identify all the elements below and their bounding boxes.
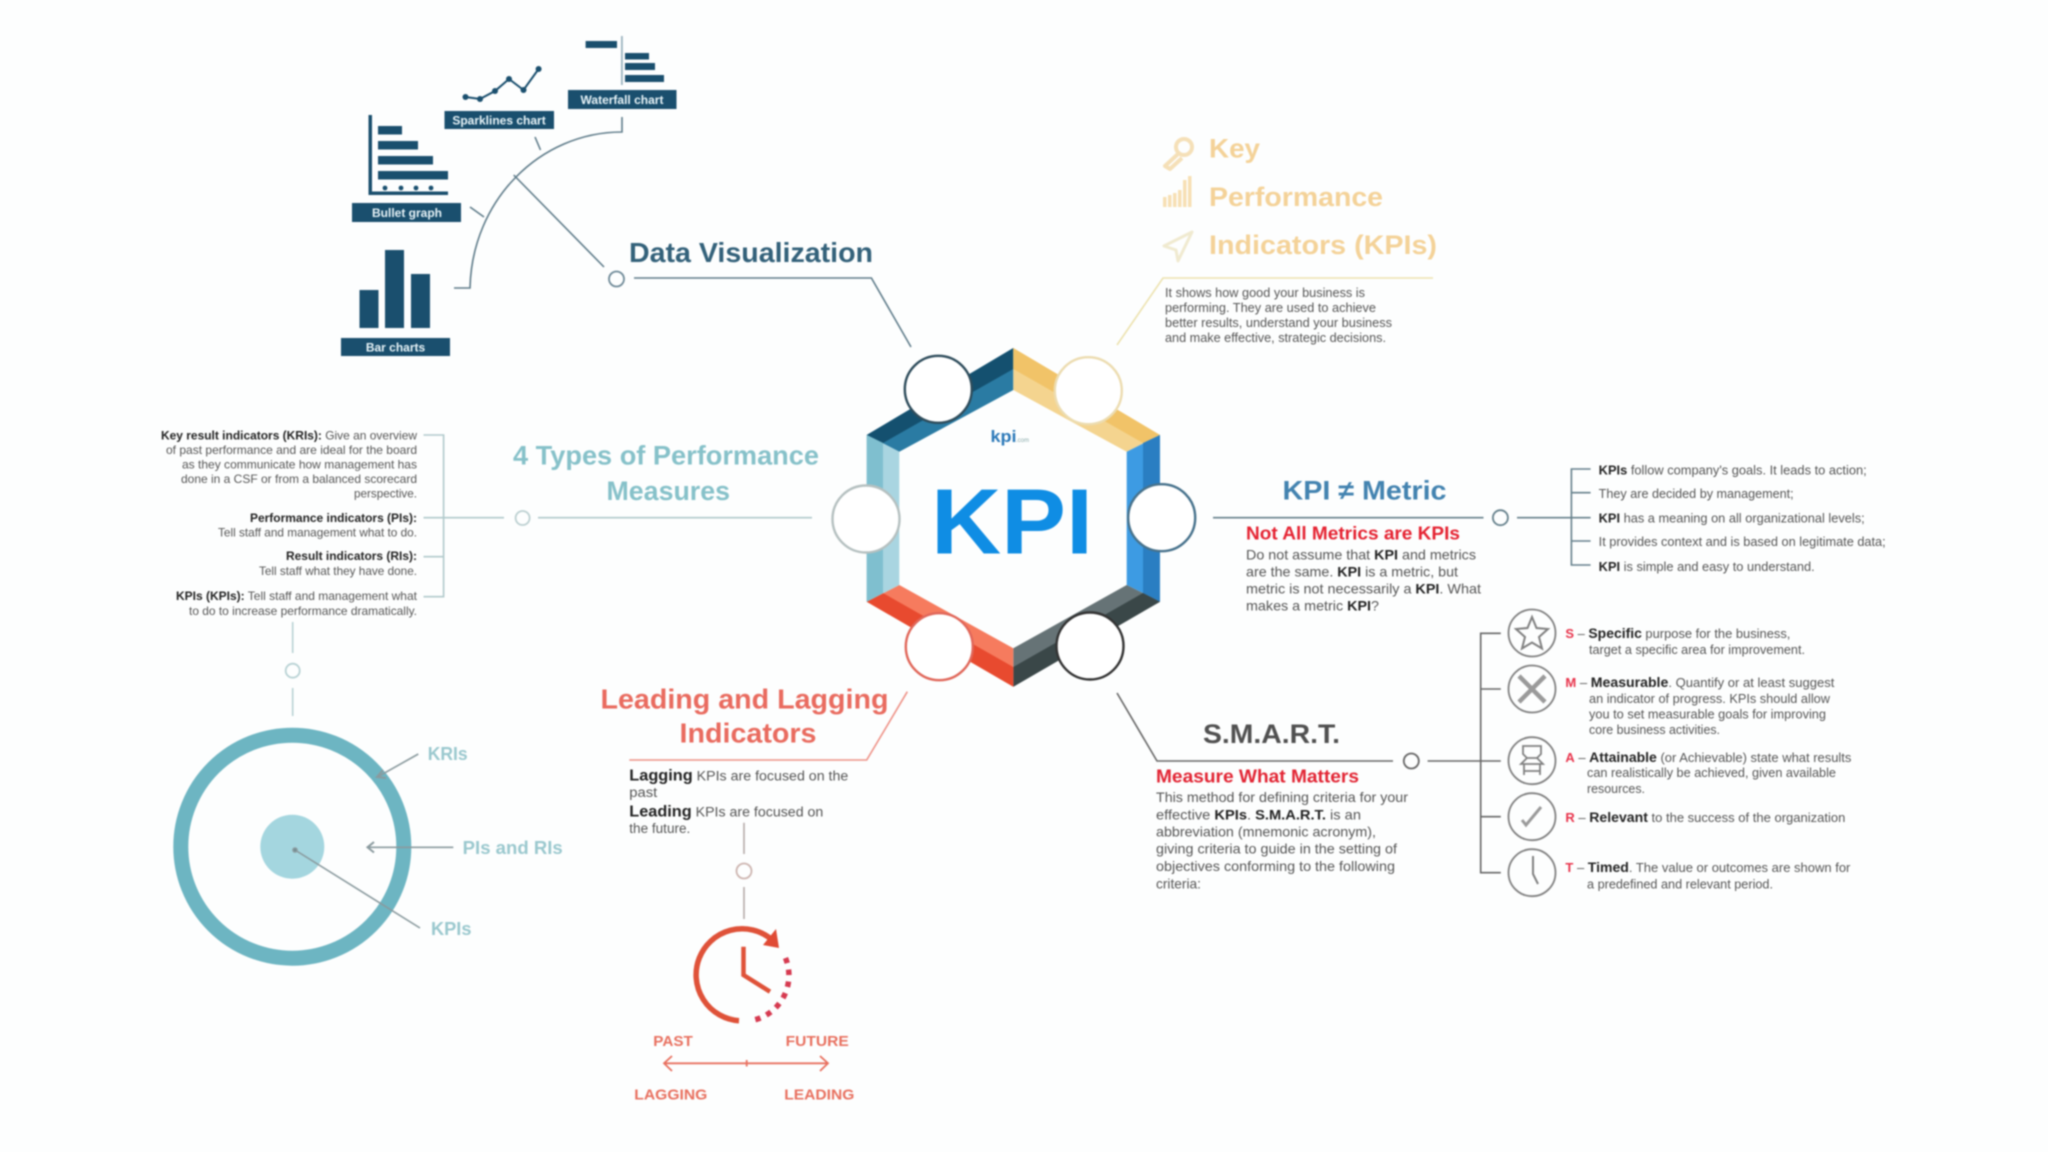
timeline: past to future: FUTURE <box>786 1033 849 1050</box>
chart icon: sparklines chart: Sparklines chart <box>452 114 546 128</box>
connector: heading to bracket <box>424 435 812 597</box>
text: kpi definition: It shows how good your business is <box>1165 286 1365 300</box>
chart icon: bar charts: Bar charts <box>366 340 426 354</box>
connector: text to rings <box>286 622 300 716</box>
icon: star <box>1508 610 1556 656</box>
list: smart criteria: S – Specific purpose for the business, <box>1565 626 1790 641</box>
text: smart explanation <box>1156 789 1408 892</box>
panel: data visualization <box>341 36 911 356</box>
icon: paper plane <box>1164 232 1192 261</box>
timeline: past to future: LEADING <box>784 1086 854 1104</box>
subheading: measure what matters: Measure What Matters <box>1156 767 1359 787</box>
arrow: kris <box>377 754 418 778</box>
list: kpi properties: They are decided by management; <box>1599 487 1794 501</box>
logo: kpi small: kpi <box>990 427 1016 446</box>
icon: crossed tools <box>1508 666 1556 712</box>
text: kpi definition: better results, understand your business <box>1165 316 1392 330</box>
diagram: concentric rings <box>181 735 563 958</box>
logo: kpi small <box>990 427 1029 446</box>
timeline: past to future: LAGGING <box>634 1086 707 1104</box>
text: performance measure definitions: KPIs (KPIs): Tell staff and management what <box>176 589 418 603</box>
chart icon: bar charts <box>341 250 450 356</box>
labels: ring names: KRIs <box>428 744 468 764</box>
text: metric explanation: Do not assume that KPI and metrics <box>1246 546 1476 562</box>
list: smart criteria: resources. <box>1587 782 1645 796</box>
text: smart explanation: This method for defining criteria for your <box>1156 789 1408 805</box>
text: performance measure definitions: of past performance and are ideal for the board <box>166 443 417 457</box>
icon: clock with arrow <box>696 929 789 1021</box>
labels: ring names: KPIs <box>431 919 472 939</box>
list: smart criteria: core business activities. <box>1589 723 1720 737</box>
heading: kpi not equal metric: KPI ≠ Metric <box>1282 476 1446 506</box>
list: kpi properties: KPI has a meaning on all organizational levels; <box>1599 512 1865 526</box>
list: kpi properties: KPIs follow company's goals. It leads to action; <box>1599 464 1867 478</box>
list: smart criteria: can realistically be achieved, given available <box>1587 766 1836 780</box>
text: performance measure definitions: perspective. <box>354 486 417 500</box>
list: smart criteria: target a specific area for improvement. <box>1589 643 1805 657</box>
hexagon segment: right blue <box>1127 435 1160 602</box>
list: smart criteria: A – Attainable (or Achievable) state what results <box>1565 750 1851 765</box>
text: lagging and leading explanation: past <box>629 785 658 800</box>
text: smart explanation: criteria: <box>1156 876 1201 892</box>
heading: 4 types <box>513 440 819 506</box>
chart icon: waterfall chart <box>568 36 676 109</box>
timeline: past to future: PAST <box>653 1033 693 1050</box>
heading: leading and lagging: Indicators <box>680 718 816 749</box>
text: lagging and leading explanation: the future. <box>629 821 690 836</box>
connector: heading to hexagon <box>1117 278 1433 345</box>
heading: key performance indicators <box>1209 134 1437 260</box>
labels: ring names <box>428 744 563 939</box>
text: kpi definition: and make effective, strategic decisions. <box>1165 331 1386 345</box>
text: smart explanation: objectives conforming to the following <box>1156 858 1395 874</box>
heading: smart: S.M.A.R.T. <box>1203 719 1340 749</box>
arrow: kpis <box>293 848 420 928</box>
text: performance measure definitions: Tell staff what they have done. <box>259 564 417 578</box>
list: smart criteria <box>1565 626 1851 892</box>
text: kpi definition <box>1165 286 1392 345</box>
list: smart criteria: you to set measurable goals for improving <box>1589 708 1826 722</box>
hexagon segment: bottom right dark <box>1013 585 1160 687</box>
heading: key performance indicators: Key <box>1209 134 1260 164</box>
labels: ring names: PIs and RIs <box>463 838 563 858</box>
heading: leading and lagging: Leading and Lagging <box>600 683 888 714</box>
hexagon segment: bottom left red <box>867 585 1013 687</box>
connector: bracket list <box>1213 469 1591 565</box>
chart icon: sparklines chart <box>444 66 554 129</box>
title: KPI: KPI <box>931 469 1093 573</box>
list: smart criteria: an indicator of progress. KPIs should allow <box>1589 692 1831 706</box>
heading: leading and lagging <box>600 683 888 749</box>
icon: check mark <box>1508 793 1556 840</box>
timeline: past to future <box>634 1033 854 1104</box>
text: performance measure definitions: Result indicators (RIs): <box>286 549 417 563</box>
text: performance measure definitions: done in a CSF or from a balanced scorecard <box>181 472 417 486</box>
text: performance measure definitions: Tell staff and management what to do. <box>218 526 417 540</box>
connector: text to clock <box>736 823 752 919</box>
icon: clock <box>1508 849 1556 896</box>
text: smart explanation: effective KPIs. S.M.A.R.T. is an <box>1156 806 1361 822</box>
icon: rising bars <box>1163 176 1192 207</box>
connector: heading to hexagon <box>454 117 911 347</box>
text: smart explanation: abbreviation (mnemonic acronym), <box>1156 824 1376 840</box>
list: smart criteria: T – Timed. The value or outcomes are shown for <box>1565 860 1850 875</box>
hexagon segment: top right yellow <box>1013 348 1160 452</box>
panel: kpi not equal metric <box>1213 464 1886 614</box>
text: smart explanation: giving criteria to guide in the setting of <box>1156 840 1397 856</box>
hexagon segment: top left navy <box>867 348 1013 452</box>
text: lagging and leading explanation: Leading KPIs are focused on <box>629 804 823 821</box>
text: performance measure definitions: Key result indicators (KRIs): Give an overview <box>161 428 417 442</box>
panel: leading and lagging indicators <box>600 683 907 1104</box>
list: kpi properties <box>1599 464 1886 574</box>
text: performance measure definitions: to do to increase performance dramatically. <box>189 604 417 618</box>
panel: smart <box>1117 610 1851 896</box>
connector: heading to hexagon <box>629 692 907 760</box>
text: lagging and leading explanation: Lagging KPIs are focused on the <box>629 768 848 785</box>
list: smart criteria: M – Measurable . Quantify or at least suggest <box>1565 675 1835 690</box>
list: kpi properties: It provides context and is based on legitimate data; <box>1599 535 1886 549</box>
panel: 4 types of performance measures <box>161 428 819 958</box>
list: kpi properties: KPI is simple and easy to understand. <box>1599 560 1815 574</box>
text: performance measure definitions: Performance indicators (PIs): <box>250 511 417 525</box>
chart icon: bullet graph <box>352 115 461 222</box>
text: metric explanation: are the same. KPI is a metric, but <box>1246 564 1458 580</box>
text: performance measure definitions: as they communicate how management has <box>182 458 417 472</box>
heading: 4 types: Measures <box>606 476 730 506</box>
icon: key <box>1165 139 1192 169</box>
text: lagging and leading explanation <box>629 768 848 836</box>
subheading: not all metrics: Not All Metrics are KPIs <box>1246 524 1460 544</box>
heading: data visualization: Data Visualization <box>629 237 873 268</box>
panel: kpi hexagon <box>832 348 1195 687</box>
logo: kpi small: .com <box>1016 438 1029 444</box>
list: smart criteria: a predefined and relevant period. <box>1587 878 1773 892</box>
text: kpi definition: performing. They are used to achieve <box>1165 301 1376 315</box>
chart icon: bullet graph: Bullet graph <box>372 206 442 220</box>
panel: key performance indicators <box>1117 134 1437 345</box>
node circles <box>832 356 1195 680</box>
icon: trophy <box>1508 737 1556 784</box>
text: metric explanation <box>1246 546 1481 614</box>
heading: key performance indicators: Performance <box>1209 182 1383 212</box>
hexagon segment: left teal <box>867 435 899 602</box>
text: performance measure definitions <box>161 428 418 618</box>
list: smart criteria: R – Relevant to the success of the organization <box>1565 810 1845 825</box>
heading: 4 types: 4 Types of Performance <box>513 440 819 470</box>
connector: hexagon to bracket <box>1117 633 1501 873</box>
chart icon: waterfall chart: Waterfall chart <box>581 93 663 107</box>
text: metric explanation: metric is not necessarily a KPI. What <box>1246 580 1481 596</box>
text: metric explanation: makes a metric KPI? <box>1246 598 1379 614</box>
arrow: pis and ris <box>368 842 453 852</box>
heading: key performance indicators: Indicators (KPIs) <box>1209 230 1437 260</box>
